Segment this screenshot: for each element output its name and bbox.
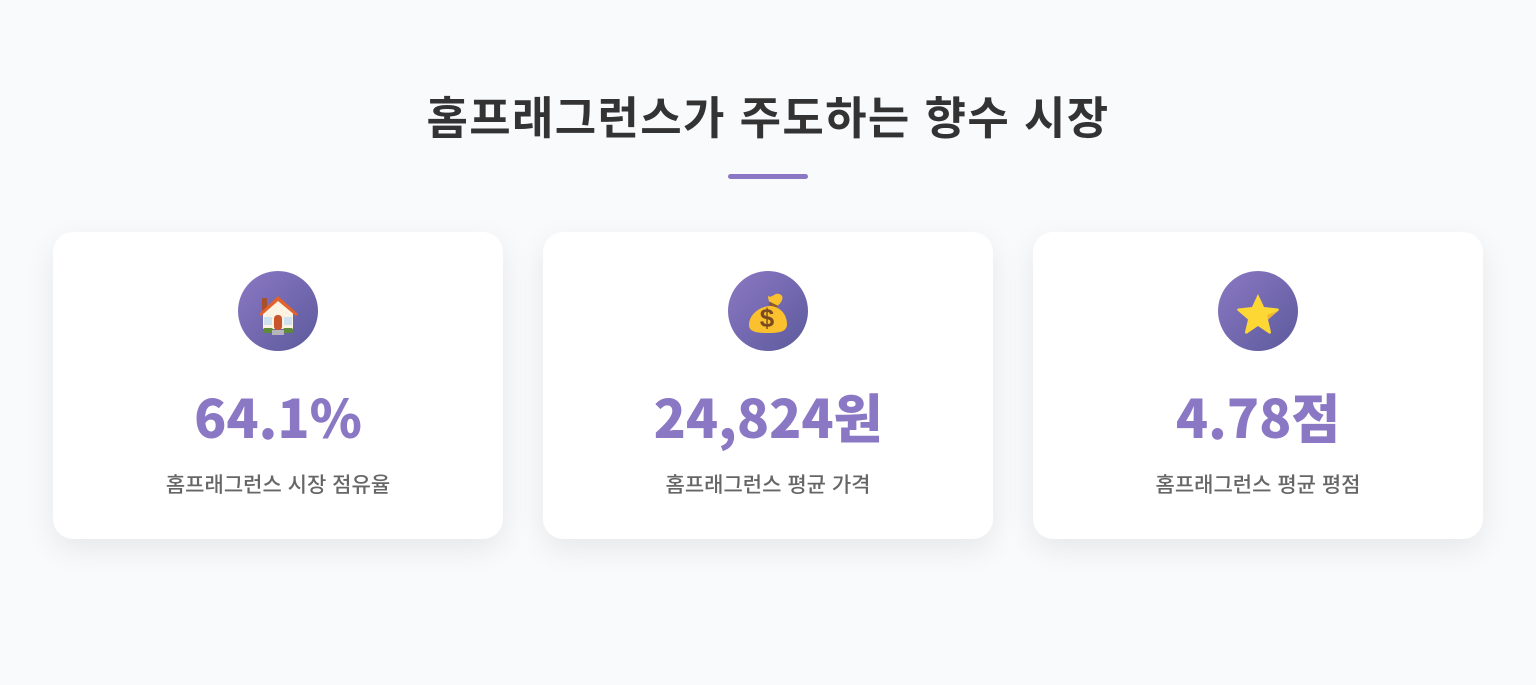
label: 홈프래그런스 시장 점유율 bbox=[166, 469, 390, 499]
icon: money bag bbox=[728, 271, 808, 351]
label: 홈프래그런스 평균 평점 bbox=[1156, 469, 1360, 499]
title underline bbox=[728, 174, 808, 179]
title: 홈프래그런스가 주도하는 향수 시장 bbox=[426, 82, 1110, 147]
icon: house bbox=[238, 271, 318, 351]
value: 24,824원 bbox=[654, 378, 882, 454]
label: 홈프래그런스 평균 가격 bbox=[666, 469, 870, 499]
panel: average rating bbox=[1033, 232, 1483, 539]
icon: money bag: $ bbox=[760, 303, 775, 333]
icon: star bbox=[1218, 271, 1298, 351]
panel: average price bbox=[543, 232, 993, 539]
panel: market share bbox=[53, 232, 503, 539]
value: 64.1% bbox=[194, 378, 362, 454]
value: 4.78점 bbox=[1176, 378, 1340, 454]
